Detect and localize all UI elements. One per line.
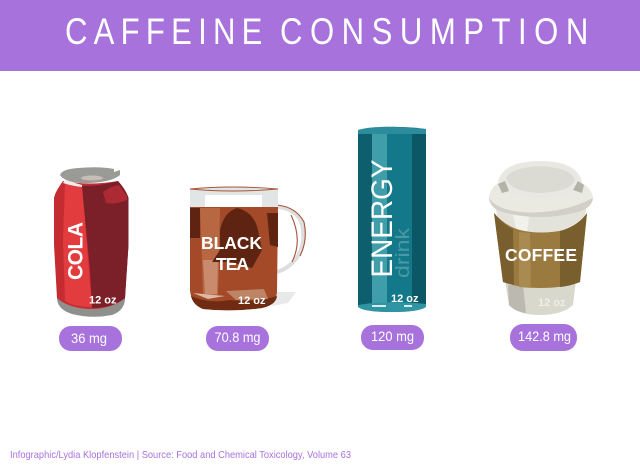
energy size: 12 oz bbox=[391, 293, 419, 305]
tea caffeine pill: 70.8 mg bbox=[214, 330, 260, 345]
coffee cup bbox=[489, 161, 593, 315]
energy label: ENERGY bbox=[366, 160, 399, 278]
tea label: BLACK bbox=[201, 233, 262, 253]
coffee label: COFFEE bbox=[505, 245, 577, 265]
energy caffeine pill bbox=[361, 325, 424, 350]
title: CAFFEINE bbox=[65, 12, 262, 53]
coffee caffeine pill: 142.8 mg bbox=[518, 329, 571, 344]
title bbox=[65, 12, 588, 53]
tea size: 12 oz bbox=[238, 295, 266, 307]
coffee size: 12 oz bbox=[538, 297, 566, 309]
cola can bbox=[54, 167, 128, 317]
source credit: Infographic/Lydia Klopfenstein | Source: Food and Chemical Toxicology, Volume 63 bbox=[10, 449, 351, 461]
cola caffeine pill bbox=[59, 326, 122, 351]
energy caffeine pill: 120 mg bbox=[371, 329, 414, 344]
cola label: COLA bbox=[64, 222, 88, 280]
drink label: drink bbox=[393, 227, 414, 278]
tea caffeine pill bbox=[206, 326, 269, 351]
cola caffeine pill: 36 mg bbox=[71, 331, 107, 346]
energy drink can bbox=[358, 127, 426, 312]
coffee caffeine pill bbox=[510, 324, 577, 351]
title: CONSUMPTION bbox=[280, 12, 588, 53]
cola size: 12 oz bbox=[89, 294, 117, 306]
black tea mug bbox=[190, 186, 305, 310]
title banner bbox=[0, 0, 640, 71]
black tea mug: TEA bbox=[216, 254, 249, 274]
